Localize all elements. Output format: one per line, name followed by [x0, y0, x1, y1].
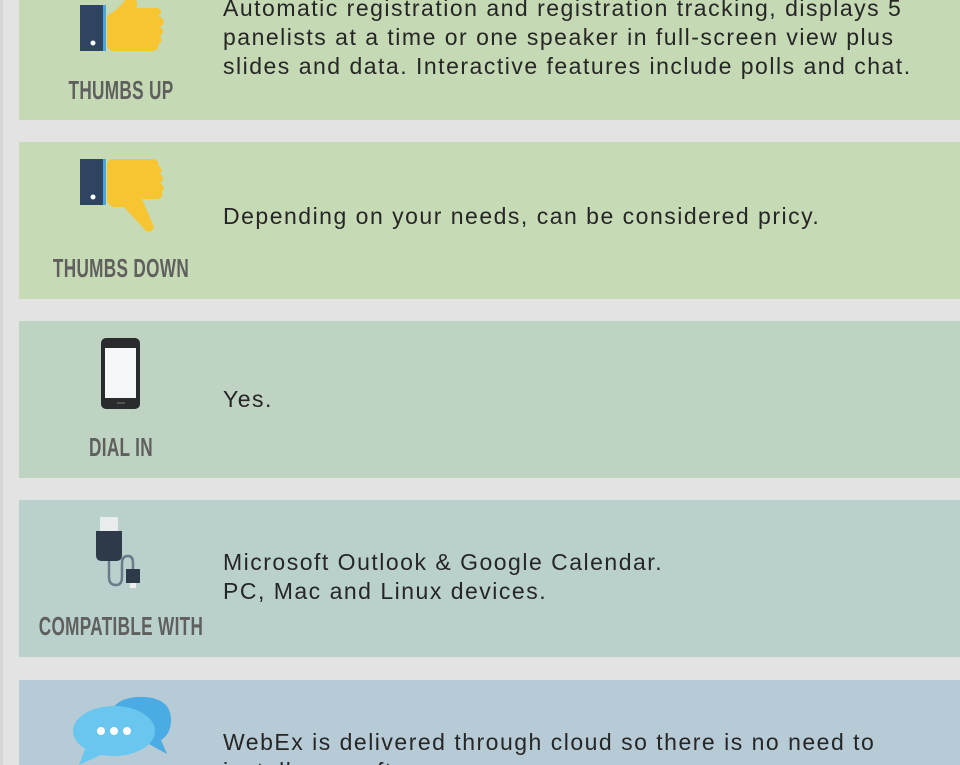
text: thumbs down: Depending on your needs, can be considered pricy. — [223, 203, 820, 229]
panel: compatible with — [19, 500, 960, 657]
icon: chat bubbles — [73, 696, 171, 765]
icon: thumbs down — [80, 159, 164, 232]
icon: usb cable — [96, 517, 140, 588]
text: thumbs up: slides and data. Interactive features include polls and chat. — [223, 53, 912, 79]
text: delivery: WebEx is delivered through cloud so there is no need to — [223, 729, 875, 755]
text: compatible with — [223, 549, 663, 604]
text: thumbs up — [223, 0, 912, 79]
panel: thumbs up — [19, 0, 960, 120]
icon: phone — [101, 338, 140, 409]
label: thumbs up: THUMBS UP — [69, 75, 173, 105]
label: compatible with: COMPATIBLE WITH — [39, 611, 203, 641]
panel: delivery — [19, 680, 960, 765]
panel: thumbs down — [19, 142, 960, 299]
text: compatible with: Microsoft Outlook & Google Calendar. — [223, 549, 663, 575]
label: thumbs down: THUMBS DOWN — [53, 253, 189, 283]
panel: dial in — [19, 321, 960, 478]
icon: thumbs up — [80, 0, 164, 51]
text: thumbs up: panelists at a time or one speaker in full-screen view plus — [223, 24, 894, 50]
text: dial in: Yes. — [223, 386, 273, 412]
label: dial in: DIAL IN — [89, 432, 153, 462]
text: compatible with: PC, Mac and Linux devices. — [223, 578, 547, 604]
